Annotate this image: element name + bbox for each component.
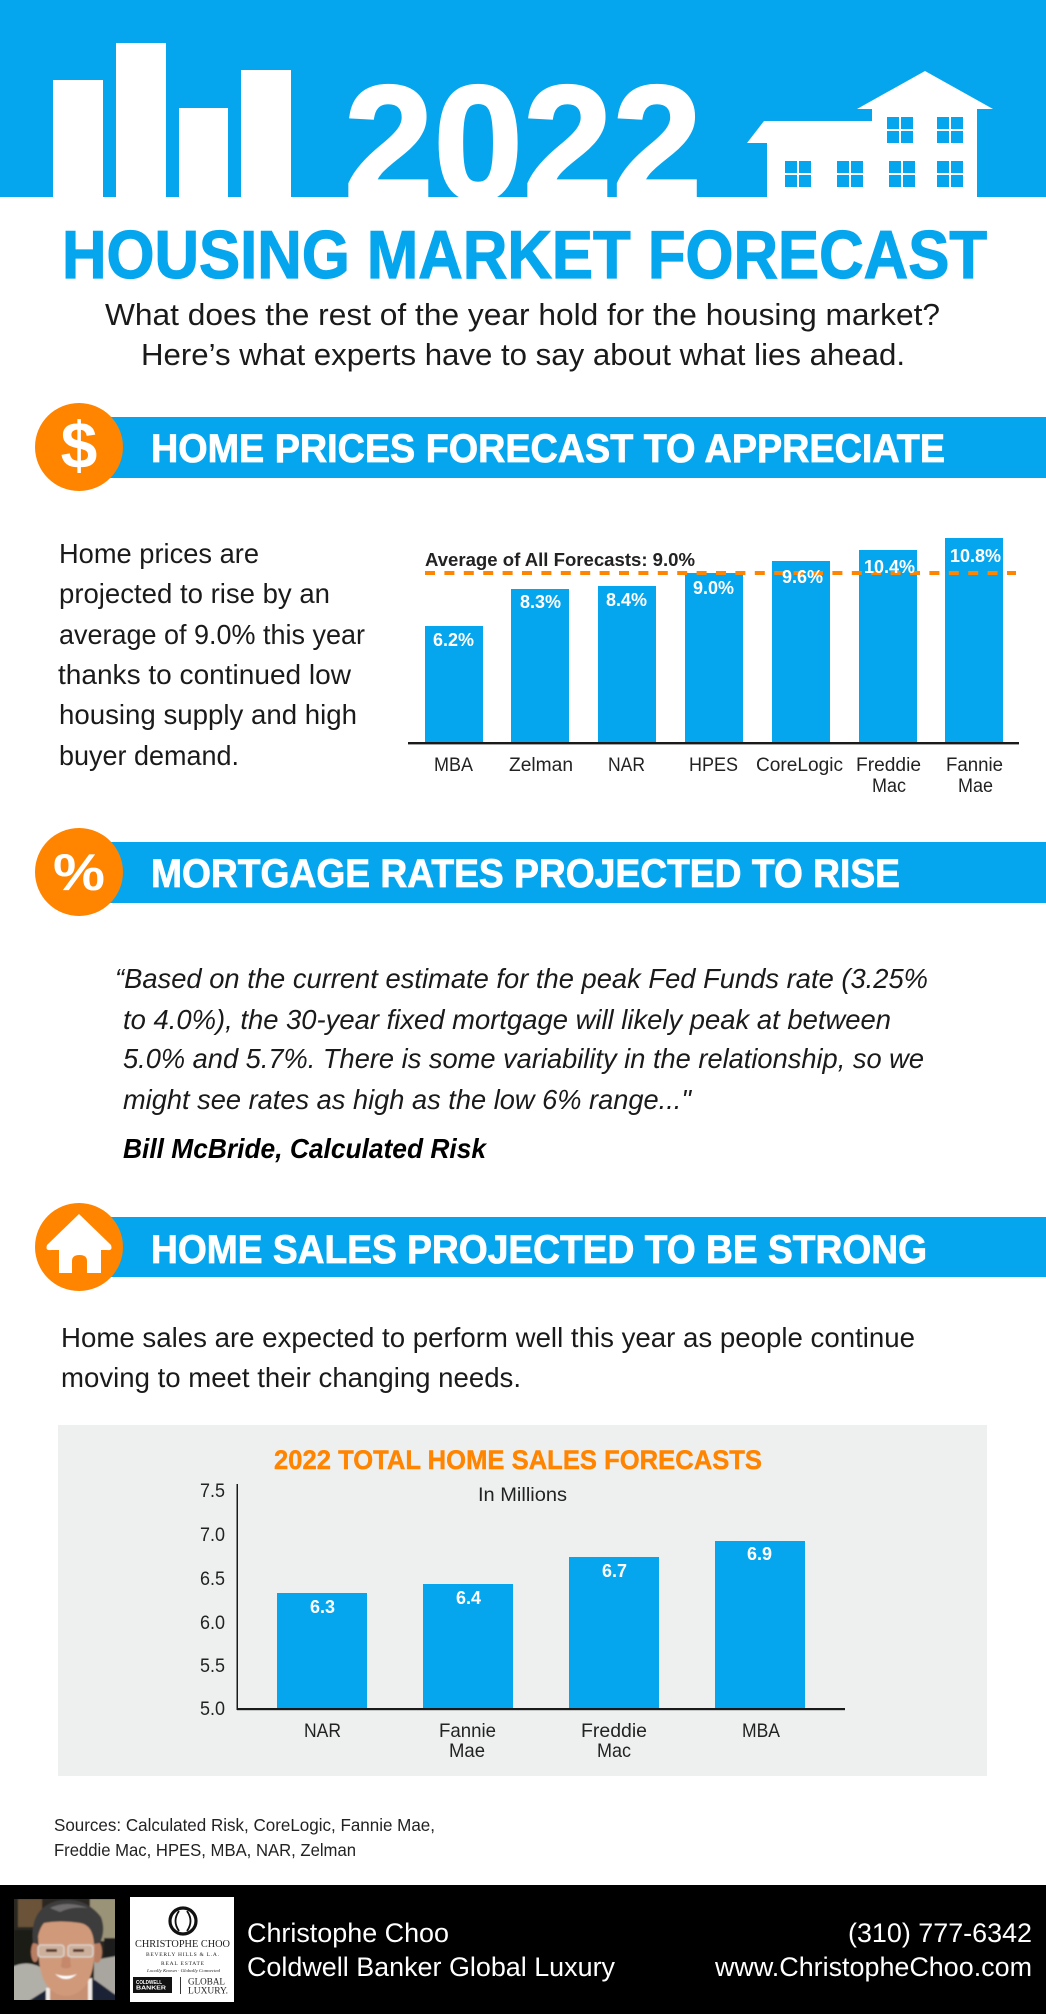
- x axis labels: MBA: [742, 1720, 780, 1742]
- section heading: home sales: [35, 1203, 1046, 1291]
- x axis labels: Freddie: [581, 1720, 647, 1742]
- home prices text: projected to rise by an: [59, 578, 330, 609]
- logo ring: [170, 1908, 196, 1934]
- quote: [115, 963, 928, 1115]
- bar values: 8.3%: [520, 592, 561, 612]
- icon: percent badge: %: [53, 844, 105, 902]
- contact details: (310) 777-6342: [848, 1918, 1032, 1948]
- bar values: [433, 546, 1001, 650]
- sources: Sources: Calculated Risk, CoreLogic, Fannie Mae,: [54, 1815, 435, 1835]
- home prices text: Home prices are: [59, 538, 259, 569]
- logo wordmark: BEVERLY HILLS & L.A.: [146, 1952, 220, 1958]
- average label: Average of All Forecasts: 9.0%: [425, 550, 695, 570]
- x axis labels: Fannie: [439, 1720, 496, 1742]
- icon: percent badge: [35, 828, 123, 916]
- home prices text: thanks to continued low: [58, 659, 351, 690]
- home sales text: Home sales are expected to perform well this year as people continue: [61, 1322, 915, 1353]
- y axis labels: 7.0: [200, 1524, 225, 1546]
- axis labels: MBA: [434, 755, 473, 776]
- axis labels: Mac: [872, 776, 906, 797]
- home prices text: average of 9.0% this year: [59, 619, 365, 650]
- bars: [277, 1541, 805, 1709]
- logo wordmark: CHRISTOPHE CHOO: [135, 1939, 230, 1950]
- icon: house badge: [35, 1203, 123, 1291]
- x axis labels: Mae: [449, 1740, 485, 1762]
- quote: might see rates as high as the low 6% range...": [123, 1084, 692, 1115]
- bar values: 6.3: [310, 1597, 335, 1617]
- panel: home sales chart: [58, 1425, 987, 1776]
- axis labels: Fannie: [946, 755, 1003, 776]
- bar values: 6.2%: [433, 630, 474, 650]
- agent photo: [12, 1897, 117, 2002]
- y axis labels: 5.5: [200, 1655, 225, 1677]
- bar chart: home price forecasts: [408, 538, 1019, 797]
- icon: dollar badge: [35, 403, 123, 491]
- global luxury wordmark: LUXURY.: [188, 1986, 228, 1996]
- sources: [54, 1815, 435, 1860]
- axis labels: Freddie: [856, 755, 921, 776]
- quote: to 4.0%), the 30-year fixed mortgage will likely peak at between: [123, 1004, 891, 1035]
- axis labels: HPES: [689, 755, 738, 776]
- icon: house: [747, 71, 993, 198]
- agent name: Coldwell Banker Global Luxury: [247, 1952, 615, 1982]
- bar values: 8.4%: [606, 590, 647, 610]
- quote attribution: Bill McBride, Calculated Risk: [123, 1133, 488, 1164]
- agent name: Christophe Choo: [247, 1918, 449, 1948]
- subtitle: [105, 297, 940, 372]
- x axis labels: [304, 1720, 780, 1762]
- bar values: 9.6%: [782, 567, 823, 587]
- chart title: 2022 TOTAL HOME SALES FORECASTS: [274, 1445, 762, 1475]
- logo wordmark: REAL ESTATE: [161, 1961, 205, 1967]
- bar values: [310, 1544, 772, 1617]
- sources: Freddie Mac, HPES, MBA, NAR, Zelman: [54, 1840, 356, 1860]
- logo wordmark: Locally Known · Globally Connected: [146, 1968, 221, 1973]
- y axis labels: 6.0: [200, 1612, 225, 1634]
- y axis labels: [200, 1480, 225, 1720]
- bar values: 6.4: [456, 1588, 481, 1608]
- axis labels: [434, 755, 1003, 797]
- section heading: mortgage rates: MORTGAGE RATES PROJECTED TO RISE: [151, 852, 900, 896]
- year 2022: 2022: [344, 51, 702, 234]
- x axis labels: NAR: [304, 1720, 341, 1742]
- home prices text: buyer demand.: [59, 740, 239, 771]
- contact details: [714, 1918, 1032, 1982]
- bar values: 10.8%: [950, 546, 1001, 566]
- bar values: 6.9: [747, 1544, 772, 1564]
- y axis labels: 7.5: [200, 1480, 225, 1502]
- agent name: [247, 1918, 615, 1982]
- home sales text: [61, 1322, 915, 1393]
- coldwell banker mark: COLDWELL: [136, 1980, 162, 1986]
- x axis labels: Mac: [597, 1740, 631, 1762]
- axis labels: NAR: [608, 755, 645, 776]
- subtitle: Here’s what experts have to say about what lies ahead.: [141, 337, 905, 372]
- axis labels: Zelman: [509, 755, 573, 776]
- header banner: [0, 0, 1046, 234]
- axis labels: CoreLogic: [756, 755, 843, 776]
- chart subtitle: In Millions: [478, 1484, 567, 1506]
- subtitle: What does the rest of the year hold for the housing market?: [105, 297, 940, 332]
- coldwell banker mark: [133, 1977, 172, 1993]
- section heading: home prices: [35, 403, 1046, 491]
- contact details: www.ChristopheChoo.com: [714, 1952, 1032, 1982]
- logo wordmark: [135, 1939, 230, 1973]
- home prices text: [58, 538, 365, 771]
- home prices text: housing supply and high: [59, 699, 357, 730]
- icon: dollar badge: $: [61, 408, 97, 482]
- section heading: mortgage rates: [35, 828, 1046, 916]
- bar values: 10.4%: [864, 557, 915, 577]
- bar values: 6.7: [602, 1561, 627, 1581]
- footer: [0, 1885, 1046, 2014]
- bar values: 9.0%: [693, 578, 734, 598]
- global luxury wordmark: GLOBAL: [188, 1978, 225, 1988]
- home sales text: moving to meet their changing needs.: [61, 1362, 521, 1393]
- company logo: [130, 1897, 234, 2002]
- section heading: home sales: HOME SALES PROJECTED TO BE STRONG: [151, 1228, 927, 1272]
- coldwell banker mark: BANKER: [136, 1986, 167, 1992]
- y axis labels: 5.0: [200, 1698, 225, 1720]
- axis labels: Mae: [958, 776, 993, 797]
- global luxury wordmark: [188, 1978, 228, 1996]
- icon: skyline bars: [53, 43, 291, 198]
- quote: “Based on the current estimate for the peak Fed Funds rate (3.25%: [115, 963, 928, 994]
- section heading: home prices: HOME PRICES FORECAST TO APPRECIATE: [151, 427, 945, 471]
- y axis labels: 6.5: [200, 1568, 225, 1590]
- quote: 5.0% and 5.7%. There is some variability in the relationship, so we: [123, 1043, 924, 1074]
